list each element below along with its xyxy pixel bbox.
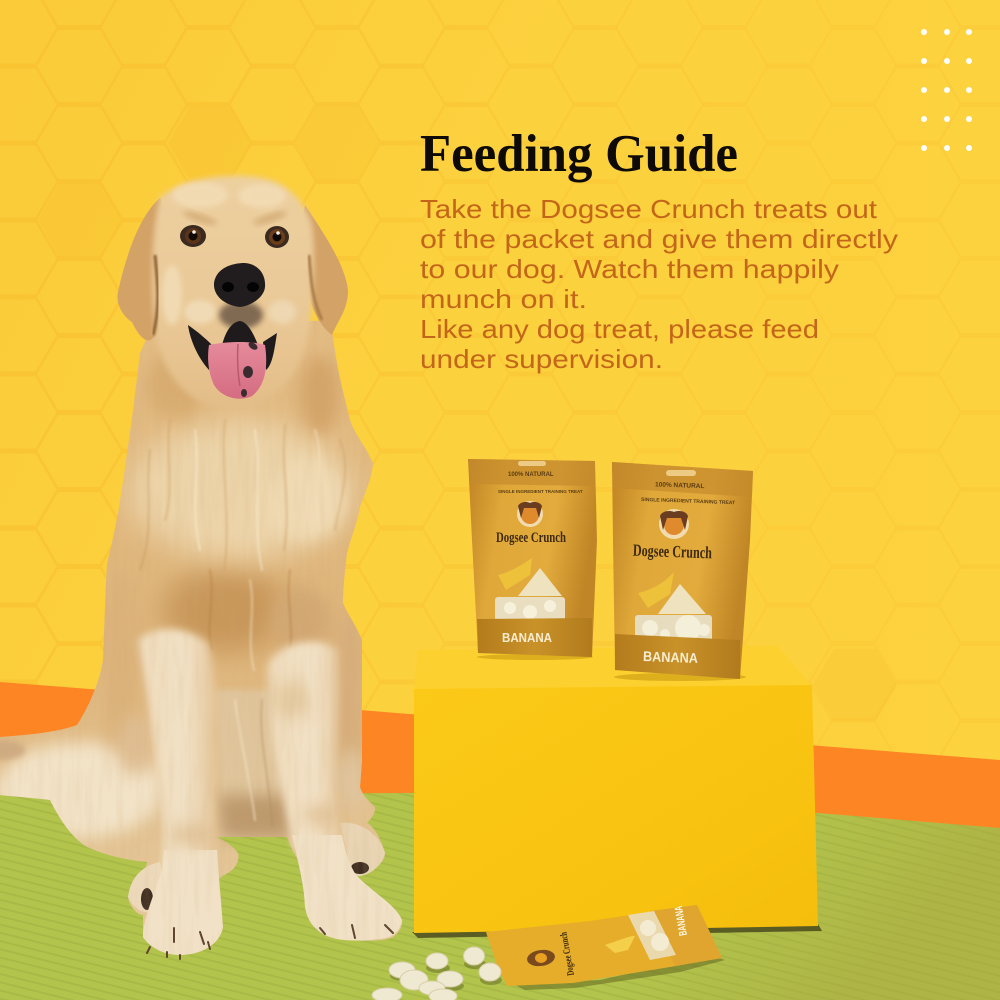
yellow gift box pedestal [412, 646, 822, 938]
product bag: right: 100% NATURAL [655, 481, 705, 490]
right hind paw [340, 823, 385, 876]
product bag: right: SINGLE INGREDIENT TRAINING TREAT [641, 497, 735, 506]
fur texture [58, 640, 378, 939]
feeding instructions text: Like any dog treat, please feed [420, 314, 819, 344]
left front leg [138, 629, 223, 955]
logo [517, 501, 543, 527]
dog nose [214, 263, 265, 307]
product bag: left: SINGLE INGREDIENT TRAINING TREAT [498, 489, 583, 494]
belly [163, 568, 287, 652]
product bag: right [612, 462, 753, 681]
dog body [0, 320, 410, 960]
dog right ear [301, 205, 348, 335]
dog left ear [117, 198, 166, 340]
bag flavor: BANANA [673, 905, 690, 937]
decorative dot grid [921, 29, 972, 151]
dog eyes [180, 225, 289, 248]
chest fluff [128, 420, 352, 560]
bag label: Dogsee Crunch [633, 541, 713, 562]
feeding instructions text: under supervision. [420, 344, 663, 374]
product bag: left: 100% NATURAL [508, 472, 554, 478]
dog head [152, 176, 322, 410]
leg shading [168, 680, 338, 845]
bag flavor: BANANA [502, 630, 553, 645]
feeding instructions text: to our dog. Watch them happily [420, 254, 839, 284]
product bag: left [468, 459, 597, 660]
title: Feeding Guide [420, 125, 738, 183]
fur strokes [140, 420, 345, 825]
bag flavor: BANANA [643, 648, 698, 666]
bag label: Dogsee Crunch [496, 530, 566, 546]
paw claws [147, 925, 393, 959]
banana chips [372, 947, 502, 1000]
hind quarter and tail [0, 742, 165, 838]
shadow between legs [216, 688, 280, 796]
logo [659, 509, 689, 539]
right flank [340, 655, 362, 752]
feeding instructions text: Take the Dogsee Crunch treats out [420, 194, 878, 224]
dog tongue [208, 341, 266, 399]
right front leg [268, 642, 402, 941]
bag label: Dogsee Crunch [558, 931, 577, 976]
feeding instructions text [420, 194, 898, 374]
green ribbed mat [0, 793, 1000, 1000]
fallen product bag [486, 905, 725, 990]
left hind paw [128, 862, 170, 913]
feeding instructions text: of the packet and give them directly [420, 224, 898, 254]
dog mouth [188, 321, 277, 370]
logo [526, 948, 556, 968]
orange diagonal band [0, 682, 1000, 830]
feeding instructions text: munch on it. [420, 284, 587, 314]
dog muzzle [219, 301, 263, 329]
dog [0, 176, 410, 960]
